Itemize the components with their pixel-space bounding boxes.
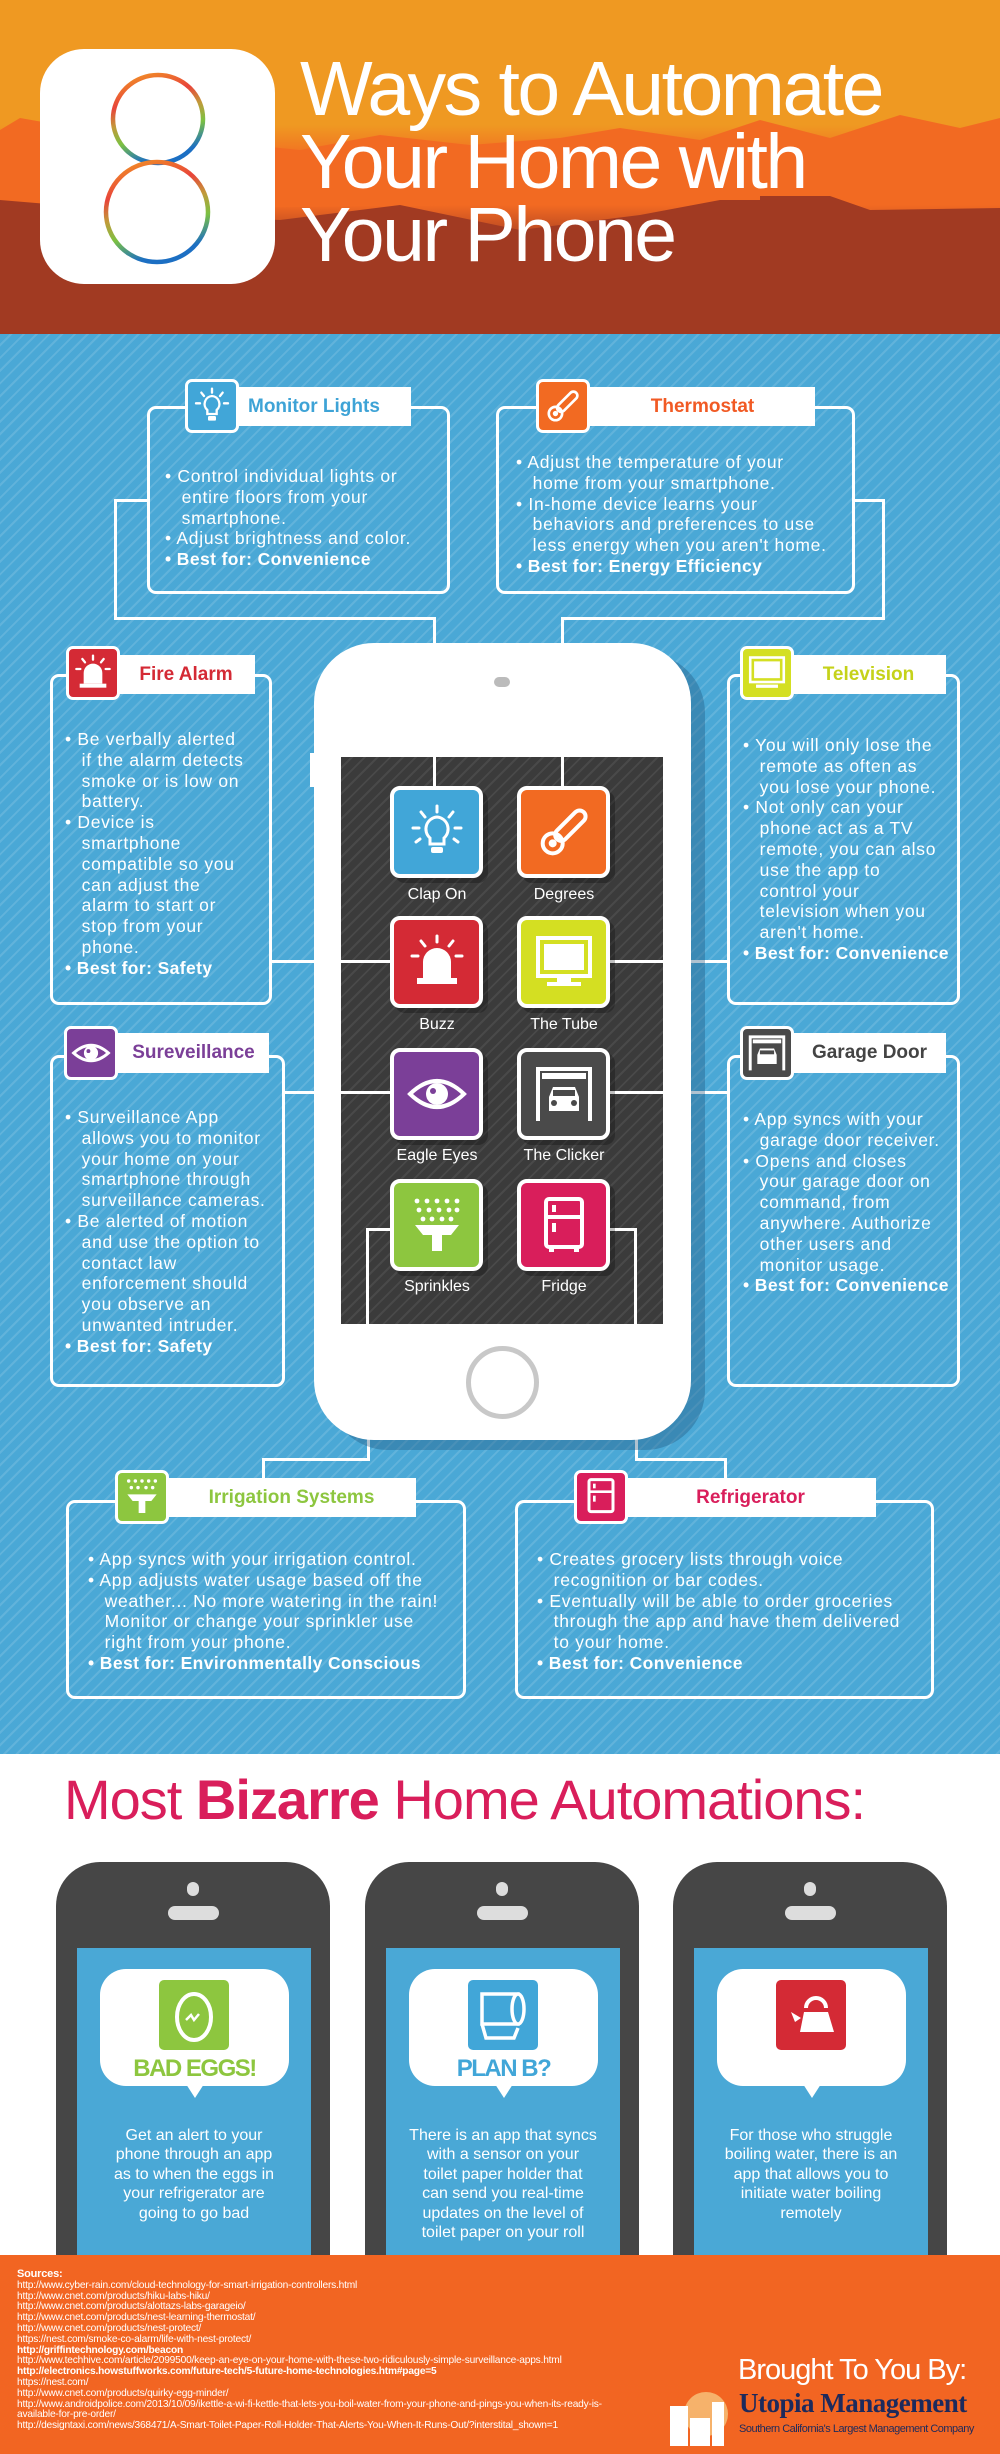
text: alarm to start or bbox=[82, 895, 216, 915]
text: use the app to bbox=[760, 860, 880, 880]
app grid: Buzz bbox=[419, 1016, 455, 1033]
app grid: Clap On bbox=[408, 886, 466, 903]
heading: Sureveillance bbox=[132, 1042, 255, 1063]
phone: Plan B bbox=[365, 1862, 639, 2262]
text: • Surveillance App bbox=[65, 1107, 219, 1127]
app: Fridge bbox=[517, 1179, 610, 1271]
text: remote, you can also bbox=[760, 839, 936, 859]
text: • App syncs with your irrigation control. bbox=[88, 1549, 417, 1569]
text: control your bbox=[760, 881, 860, 901]
text: battery. bbox=[82, 791, 144, 811]
phone: Bad Eggs: Get an alert to your bbox=[126, 2127, 262, 2144]
phone: Bad Eggs: your refrigerator are bbox=[123, 2185, 265, 2202]
central phone bbox=[314, 643, 691, 1440]
sources: http://www.cyber-rain.com/cloud-technology-for-smart-irrigation-controllers.html bbox=[17, 2280, 357, 2291]
panel: Television bbox=[727, 646, 960, 1005]
phone: Bad Eggs: as to when the eggs in bbox=[114, 2166, 274, 2183]
phone: Kettle: boiling water, there is an bbox=[725, 2146, 897, 2163]
phone: Kettle bbox=[673, 1862, 947, 2262]
heading: Thermostat bbox=[651, 396, 754, 416]
app grid: The Clicker bbox=[524, 1147, 604, 1164]
panel: Irrigation Systems bbox=[66, 1470, 466, 1699]
heading: Irrigation Systems bbox=[209, 1486, 374, 1508]
sources bbox=[17, 2268, 602, 2431]
title: Your Phone bbox=[300, 192, 675, 278]
text bbox=[65, 729, 244, 978]
heading: Garage Door bbox=[812, 1042, 927, 1063]
text: if the alarm detects bbox=[82, 750, 244, 770]
text: command, from bbox=[760, 1192, 890, 1212]
text: right from your phone. bbox=[105, 1632, 291, 1652]
text: smoke or is low on bbox=[82, 771, 239, 791]
bubble: PLAN B? bbox=[457, 2055, 550, 2082]
text: • Best for: Energy Efficiency bbox=[516, 556, 762, 576]
sources: http://www.cnet.com/products/hiku-labs-hiku/ bbox=[17, 2291, 210, 2302]
icon: thermometer bbox=[536, 379, 590, 433]
text: Monitor or change your sprinkler use bbox=[105, 1611, 414, 1631]
text: weather... No more watering in the rain! bbox=[105, 1591, 438, 1611]
text: • Be alerted of motion bbox=[65, 1211, 248, 1231]
text: your home on your bbox=[82, 1149, 240, 1169]
text: and use the option to bbox=[82, 1232, 260, 1252]
text: • Control individual lights or bbox=[165, 466, 397, 486]
phone: Bad Eggs: phone through an app bbox=[116, 2146, 272, 2163]
heading: Refrigerator bbox=[696, 1486, 805, 1508]
sources: http://www.androidpolice.com/2013/10/09/ikettle-a-wi-fi-kettle-that-lets-you-boil-water-from-your-phone-and-pings-you-when-its-ready-is- bbox=[17, 2399, 602, 2410]
bubble bbox=[100, 1969, 289, 2086]
header banner bbox=[0, 0, 1000, 334]
brought to you by: Brought To You By: bbox=[738, 2354, 966, 2386]
text: smartphone bbox=[82, 833, 181, 853]
text: behaviors and preferences to use bbox=[533, 514, 815, 534]
app: Degrees bbox=[517, 786, 610, 878]
text: aren't home. bbox=[760, 922, 865, 942]
text: • Best for: Convenience bbox=[743, 1275, 949, 1295]
text: • Creates grocery lists through voice bbox=[537, 1549, 843, 1569]
text bbox=[165, 466, 411, 569]
phone: Plan B: toilet paper on your roll bbox=[422, 2224, 584, 2241]
panel: Garage Door bbox=[727, 1026, 960, 1387]
phone: Bad Eggs bbox=[56, 1862, 330, 2262]
connector lines bbox=[114, 499, 885, 1478]
app grid: Eagle Eyes bbox=[397, 1147, 477, 1164]
sources: Sources: bbox=[17, 2268, 62, 2280]
text: • Adjust the temperature of your bbox=[516, 452, 784, 472]
text: • Not only can your bbox=[743, 797, 903, 817]
text: television when you bbox=[760, 901, 926, 921]
text: can adjust the bbox=[82, 875, 200, 895]
text: your garage door on bbox=[760, 1171, 931, 1191]
screen bbox=[341, 757, 663, 1324]
text bbox=[88, 1549, 438, 1673]
text: monitor usage. bbox=[760, 1255, 885, 1275]
phone: Plan B: updates on the level of bbox=[422, 2205, 584, 2222]
text: compatible so you bbox=[82, 854, 235, 874]
text: • Opens and closes bbox=[743, 1151, 907, 1171]
heading bbox=[117, 655, 255, 694]
text: smartphone through bbox=[82, 1169, 251, 1189]
phone: Bad Eggs: going to go bad bbox=[139, 2205, 249, 2222]
sources: http://designtaxi.com/news/368471/A-Smart-Toilet-Paper-Roll-Holder-That-Alerts-You-When-It-Runs-Out/?interstital_shown=1 bbox=[17, 2420, 558, 2431]
app grid: The Tube bbox=[530, 1016, 598, 1033]
app: Sprinkles bbox=[390, 1179, 483, 1271]
app grid bbox=[390, 786, 615, 1295]
text: you observe an bbox=[82, 1294, 211, 1314]
app grid: Fridge bbox=[541, 1278, 587, 1295]
sources: http://www.cnet.com/products/nest-learning-thermostat/ bbox=[17, 2312, 255, 2323]
text: • Device is bbox=[65, 812, 155, 832]
bubble: BAD EGGS! bbox=[133, 2055, 256, 2082]
text: other users and bbox=[760, 1234, 892, 1254]
speaker bbox=[494, 677, 510, 687]
heading bbox=[590, 387, 815, 426]
text: remote as often as bbox=[760, 756, 917, 776]
text: smartphone. bbox=[182, 508, 287, 528]
bubble bbox=[717, 1969, 906, 2086]
heading bbox=[118, 1033, 269, 1073]
text bbox=[743, 1109, 949, 1295]
footer bbox=[0, 2255, 1000, 2454]
icon: eye bbox=[64, 1026, 118, 1080]
skyline silhouette bbox=[0, 115, 1000, 241]
text: garage door receiver. bbox=[760, 1130, 940, 1150]
text: • You will only lose the bbox=[743, 735, 932, 755]
heading: Television bbox=[823, 664, 914, 684]
heading bbox=[793, 1033, 946, 1073]
text: • Best for: Safety bbox=[65, 958, 213, 978]
title bbox=[300, 46, 882, 278]
heading: Monitor Lights bbox=[248, 396, 380, 416]
text: • In-home device learns your bbox=[516, 494, 758, 514]
panel: Refrigerator bbox=[515, 1470, 934, 1699]
phone: Plan B: can send you real-time bbox=[422, 2185, 584, 2202]
sources: http://griffintechnology.com/beacon bbox=[17, 2345, 183, 2356]
heading bbox=[791, 655, 946, 694]
text: home from your smartphone. bbox=[533, 473, 776, 493]
heading bbox=[236, 387, 411, 426]
text bbox=[516, 452, 827, 576]
text: • Best for: Convenience bbox=[165, 549, 371, 569]
text: phone act as a TV bbox=[760, 818, 913, 838]
sources: https://nest.com/smoke-co-alarm/life-with-nest-protect/ bbox=[17, 2334, 251, 2345]
text: allows you to monitor bbox=[82, 1128, 261, 1148]
text: • Be verbally alerted bbox=[65, 729, 236, 749]
icon: fridge bbox=[574, 1470, 628, 1524]
app grid: Degrees bbox=[534, 886, 594, 903]
text: • Best for: Environmentally Conscious bbox=[88, 1653, 421, 1673]
text: anywhere. Authorize bbox=[760, 1213, 932, 1233]
icon: siren bbox=[66, 646, 120, 700]
sources: http://electronics.howstuffworks.com/future-tech/5-future-home-technologies.htm#page=5 bbox=[17, 2366, 436, 2377]
panel: Monitor Lights bbox=[147, 379, 450, 594]
logo: Utopia Management bbox=[670, 2388, 974, 2446]
text: • App adjusts water usage based off the bbox=[88, 1570, 423, 1590]
app: Eagle Eyes bbox=[390, 1048, 483, 1140]
logo: Utopia Management: Southern California's Largest Management Company bbox=[739, 2423, 974, 2435]
sources: http://www.cnet.com/products/nest-protect/ bbox=[17, 2323, 201, 2334]
phone: Kettle: initiate water boiling bbox=[741, 2185, 881, 2202]
text: entire floors from your bbox=[182, 487, 368, 507]
text: surveillance cameras. bbox=[82, 1190, 266, 1210]
text: recognition or bar codes. bbox=[554, 1570, 764, 1590]
side buttons bbox=[310, 753, 316, 787]
sources: http://www.cnet.com/products/quirky-egg-minder/ bbox=[17, 2388, 228, 2399]
title: Ways to Automate bbox=[300, 46, 882, 132]
phone: Plan B: toilet paper holder that bbox=[423, 2166, 583, 2183]
text: • Best for: Convenience bbox=[537, 1653, 743, 1673]
text: through the app and have them delivered bbox=[554, 1611, 900, 1631]
bubble bbox=[409, 1969, 598, 2086]
text: • Adjust brightness and color. bbox=[165, 528, 411, 548]
text: to your home. bbox=[554, 1632, 670, 1652]
app: The Tube bbox=[517, 916, 610, 1008]
phone: Kettle: app that allows you to bbox=[734, 2166, 888, 2183]
logo: Utopia Management: Utopia Management bbox=[739, 2388, 967, 2418]
icon: tv bbox=[740, 646, 794, 700]
phone: Kettle: For those who struggle bbox=[730, 2127, 892, 2144]
icon: 8 app tile bbox=[40, 49, 275, 284]
text bbox=[743, 735, 949, 963]
app: Clap On bbox=[390, 786, 483, 878]
text bbox=[65, 1107, 266, 1356]
sources: http://www.cnet.com/products/alottazs-labs-garageio/ bbox=[17, 2301, 246, 2312]
text bbox=[537, 1549, 900, 1673]
text: phone. bbox=[82, 937, 139, 957]
home button bbox=[466, 1346, 539, 1419]
title: Your Home with bbox=[300, 119, 806, 205]
icon: light bulb bbox=[185, 379, 239, 433]
icon: garage bbox=[740, 1026, 794, 1080]
phone: Plan B: with a sensor on your bbox=[427, 2146, 579, 2163]
text: • Best for: Convenience bbox=[743, 943, 949, 963]
phone: Plan B: There is an app that syncs bbox=[409, 2127, 597, 2144]
panel: Thermostat bbox=[496, 379, 855, 594]
phone: Kettle: remotely bbox=[780, 2205, 842, 2222]
panel: Sureveillance bbox=[50, 1026, 285, 1387]
text: • App syncs with your bbox=[743, 1109, 923, 1129]
text: enforcement should bbox=[82, 1273, 248, 1293]
text: • Best for: Safety bbox=[65, 1336, 213, 1356]
text: less energy when you aren't home. bbox=[533, 535, 827, 555]
heading: Most Bizarre Home Automations: Most Bizarre Home Automations: bbox=[64, 1768, 865, 1831]
heading bbox=[625, 1478, 876, 1517]
app: Buzz bbox=[390, 916, 483, 1008]
text: stop from your bbox=[82, 916, 203, 936]
blue section background bbox=[0, 334, 1000, 1754]
text: unwanted intruder. bbox=[82, 1315, 238, 1335]
app grid: Sprinkles bbox=[404, 1278, 470, 1295]
text: you lose your phone. bbox=[760, 777, 936, 797]
sources: https://nest.com/ bbox=[17, 2377, 88, 2388]
text: contact law bbox=[82, 1253, 177, 1273]
text: • Eventually will be able to order groceries bbox=[537, 1591, 893, 1611]
sources: available-for-pre-order/ bbox=[17, 2409, 116, 2420]
icon: sprinkler bbox=[115, 1470, 169, 1524]
app: The Clicker bbox=[517, 1048, 610, 1140]
heading bbox=[167, 1478, 416, 1517]
heading: Fire Alarm bbox=[139, 664, 233, 684]
panel: Fire Alarm bbox=[50, 646, 272, 1005]
sources: http://www.techhive.com/article/2099500/keep-an-eye-on-your-home-with-these-two-ridiculously-simple-surveillance-apps.html bbox=[17, 2355, 562, 2366]
